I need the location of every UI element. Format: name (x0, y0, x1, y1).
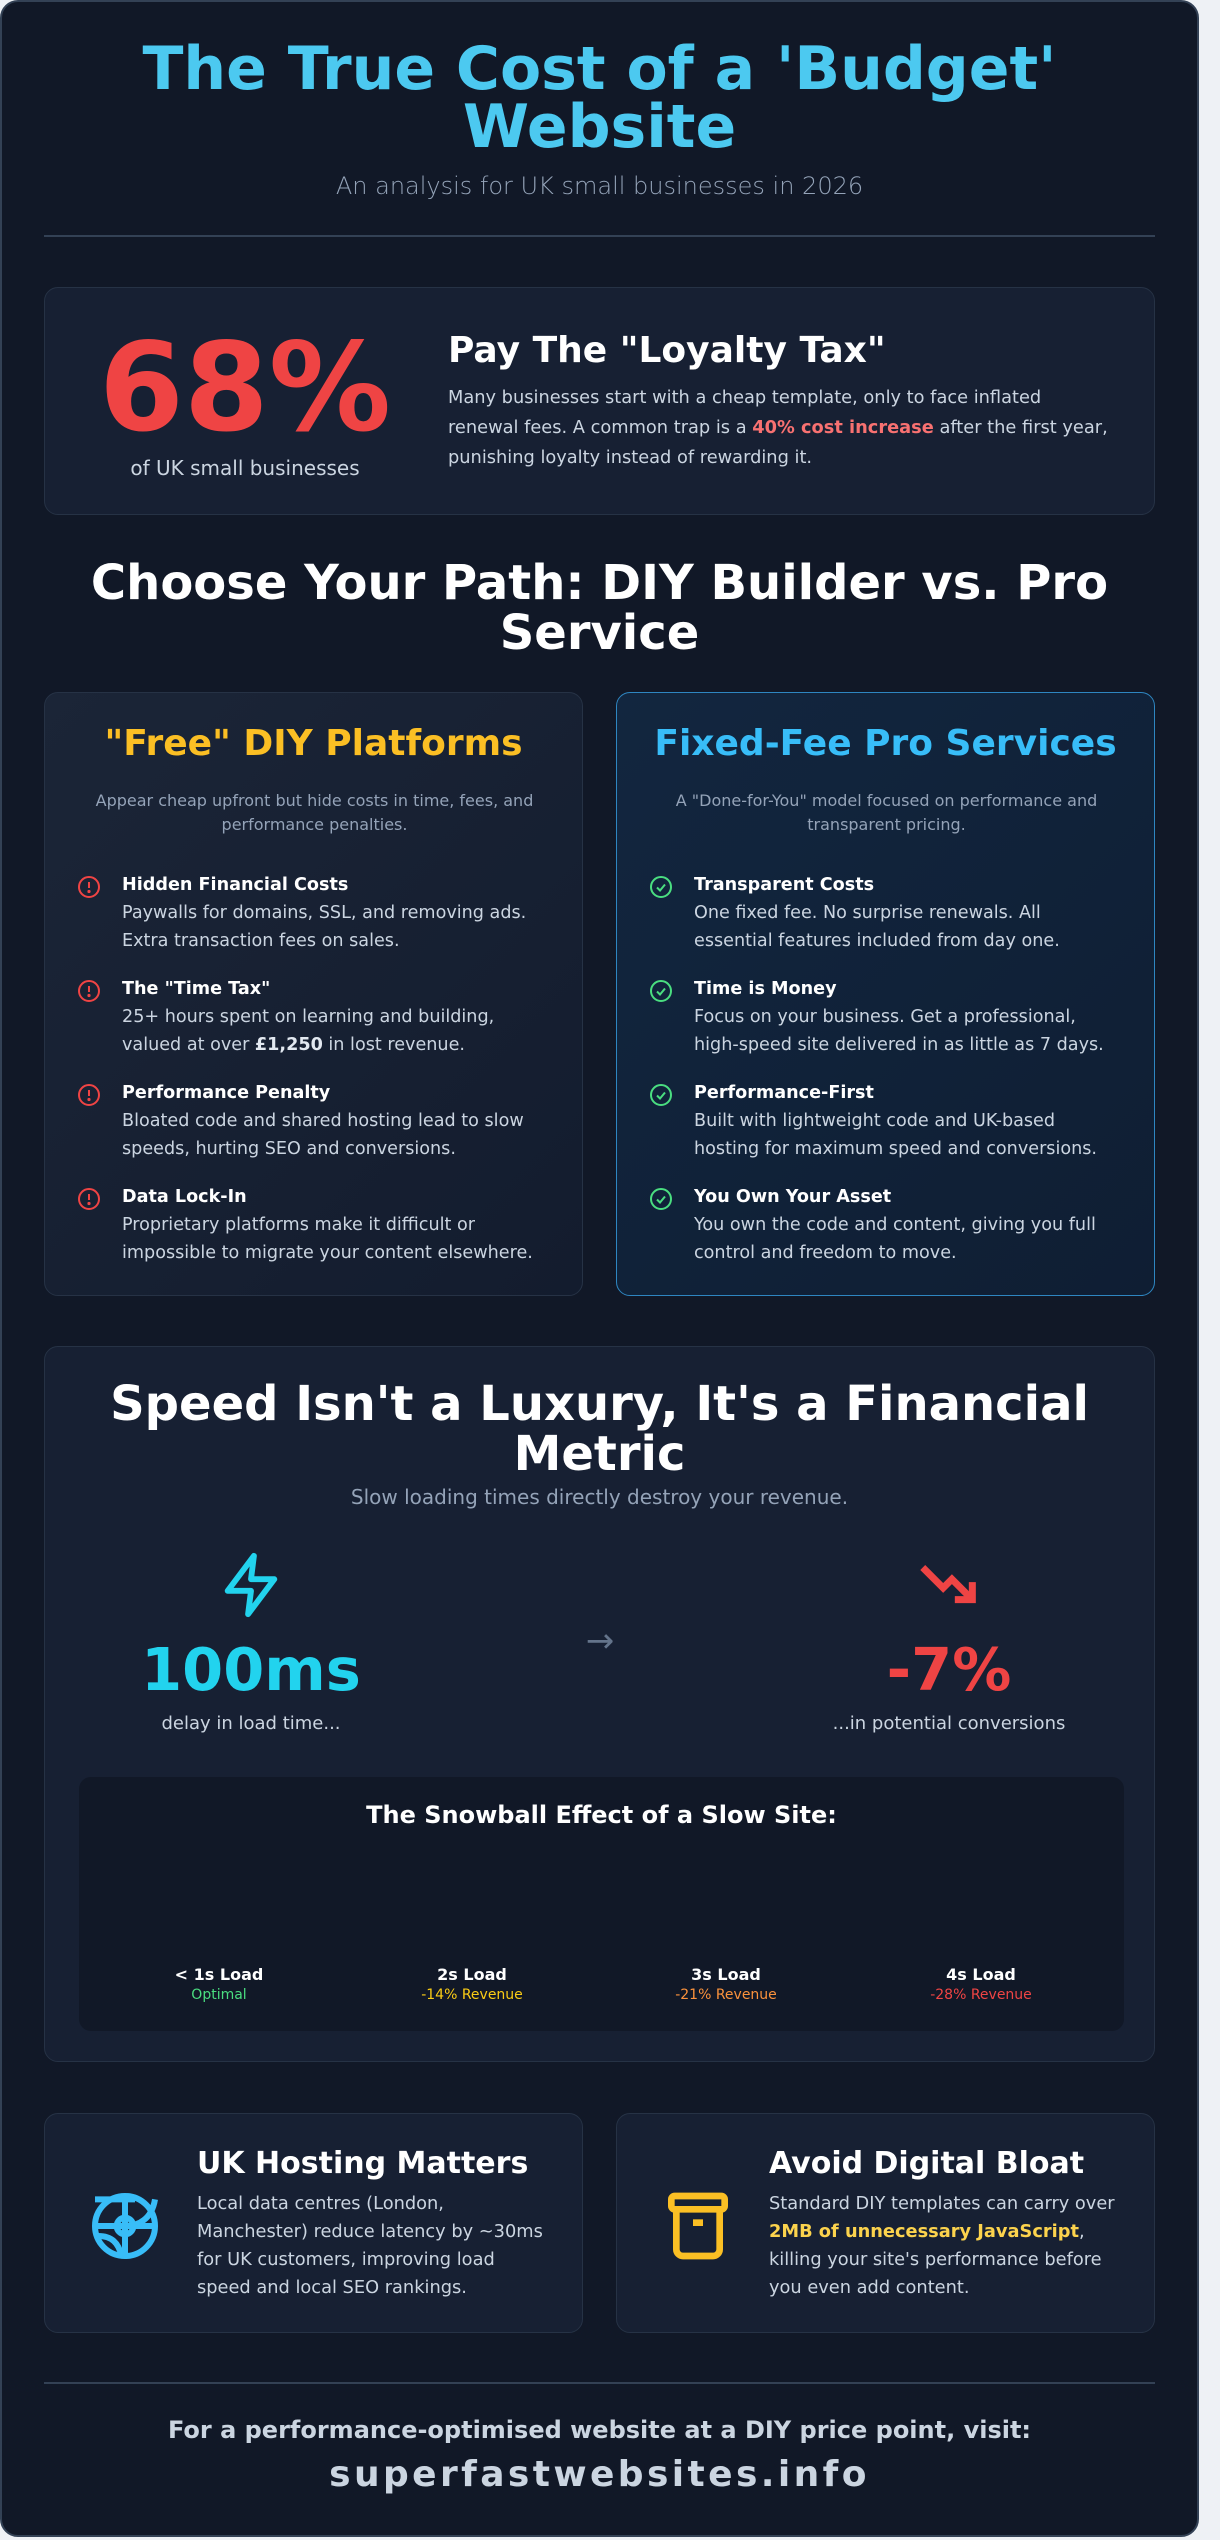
label: 3s (675, 1965, 777, 2003)
item: time is money: Focus on your business. Get a professional, (694, 1007, 1076, 1027)
heading: choose your path (91, 555, 1108, 661)
big stat 68%: 68% (99, 317, 391, 459)
label: <1s: < 1s Load (175, 1965, 263, 1984)
item: own your asset: control and freedom to move. (694, 1243, 957, 1263)
text: killing your site's performance before (769, 2249, 1102, 2270)
footer url: superfastwebsites.info (329, 2454, 870, 2495)
item: performance penalty (78, 1083, 524, 1159)
panel: pro services (616, 692, 1155, 1296)
body text: Many businesses start with a cheap template, only to face inflated (448, 387, 1041, 408)
label: 2s: 2s Load (437, 1965, 507, 1984)
item: data lock-in (78, 1187, 533, 1263)
item: transparent costs (650, 875, 1060, 951)
text: Manchester) reduce latency by ~30ms (197, 2221, 543, 2242)
item: time is money (650, 979, 1104, 1055)
item: performance penalty: speeds, hurting SEO and conversions. (122, 1139, 456, 1159)
text: speed and local SEO rankings. (197, 2277, 467, 2298)
item: time tax: 25+ hours spent on learning and building, (122, 1007, 494, 1027)
panel: loyalty tax stat (44, 287, 1155, 515)
heading: Metric (514, 1426, 685, 1482)
body text: renewal fees. A common trap is a 40% cost increase after the first year, (448, 417, 1108, 438)
item: time tax: valued at over £1,250 in lost revenue. (122, 1035, 465, 1055)
heading (110, 1376, 1089, 1482)
label: 4s: -28% Revenue (930, 1987, 1032, 2003)
heading: "Free" DIY Platforms (104, 723, 523, 764)
title: The True Cost of a 'Budget' (142, 34, 1057, 104)
item: hidden costs: Extra transaction fees on sales. (122, 931, 400, 951)
label: <1s (175, 1965, 263, 2003)
heading: Speed Isn't a Luxury, It's a Financial (110, 1376, 1089, 1432)
icon: lightning (224, 1552, 278, 1618)
item: transparent costs: Transparent Costs (694, 875, 874, 895)
panel: UK hosting (44, 2113, 583, 2333)
icon: trending down (920, 1565, 976, 1604)
heading: Avoid Digital Bloat (769, 2146, 1084, 2181)
stat: 100ms (141, 1552, 361, 1734)
heading: Fixed-Fee Pro Services (654, 723, 1117, 764)
stat caption: of UK small businesses (130, 456, 360, 480)
label: 2s: -14% Revenue (421, 1987, 523, 2003)
item: performance-first (650, 1083, 1097, 1159)
label: 3s: 3s Load (691, 1965, 761, 1984)
item: performance-first: hosting for maximum speed and conversions. (694, 1139, 1097, 1159)
body text (448, 387, 1108, 468)
stat: 100ms: delay in load time... (161, 1713, 341, 1734)
item: data lock-in: Proprietary platforms make it difficult or (122, 1215, 475, 1235)
item: own your asset: You Own Your Asset (694, 1187, 891, 1207)
heading: loyalty tax: Pay The "Loyalty Tax" (448, 330, 886, 371)
item: performance penalty: Performance Penalty (122, 1083, 330, 1103)
item: time tax (78, 979, 494, 1055)
icon: globe (92, 2193, 158, 2259)
item: own your asset (650, 1187, 1096, 1263)
item: transparent costs: One fixed fee. No surprise renewals. All (694, 903, 1041, 923)
label: 4s (930, 1965, 1032, 2003)
stat: -7%: -7% (887, 1635, 1011, 1704)
item: data lock-in: Data Lock-In (122, 1187, 247, 1207)
panel: digital bloat (616, 2113, 1155, 2333)
subtitle: An analysis for UK small businesses in 2026 (336, 172, 863, 200)
body text: punishing loyalty instead of rewarding it. (448, 447, 812, 468)
heading: choose your path: Service (500, 605, 699, 661)
heading: UK Hosting Matters (197, 2146, 528, 2181)
stat: -7% (833, 1565, 1065, 1734)
stat: -7%: ...in potential conversions (833, 1713, 1065, 1734)
stat: 100ms: 100ms (141, 1635, 361, 1704)
subheading: Slow loading times directly destroy your revenue. (351, 1485, 848, 1509)
item: data lock-in: impossible to migrate your content elsewhere. (122, 1243, 533, 1263)
text: 2MB of unnecessary JavaScript, (769, 2221, 1085, 2242)
icon: archive box (668, 2192, 728, 2260)
heading: choose your path: Choose Your Path: DIY Builder vs. Pro (91, 555, 1108, 611)
text: you even add content. (769, 2277, 970, 2298)
item: own your asset: You own the code and content, giving you full (694, 1215, 1096, 1235)
item: transparent costs: essential features included from day one. (694, 931, 1060, 951)
panel: DIY platforms (44, 692, 583, 1296)
chart title: The Snowball Effect of a Slow Site: (366, 1801, 837, 1829)
item: time is money: Time is Money (694, 979, 837, 999)
text: for UK customers, improving load (197, 2249, 495, 2270)
panel: speed metric (44, 1346, 1155, 2062)
label: 4s: 4s Load (946, 1965, 1016, 1984)
text (769, 2193, 1115, 2298)
text (197, 2193, 543, 2298)
item: time tax: The "Time Tax" (122, 979, 270, 999)
item: hidden costs: Paywalls for domains, SSL, and removing ads. (122, 903, 526, 923)
text: Local data centres (London, (197, 2193, 444, 2214)
description: A "Done-for-You" model focused on performance and transparent pricing. (676, 791, 1097, 834)
text: Standard DIY templates can carry over (769, 2193, 1115, 2214)
label: 3s: -21% Revenue (675, 1987, 777, 2003)
label: 2s (421, 1965, 523, 2003)
label: <1s: Optimal (191, 1987, 247, 2003)
chart: snowball effect (79, 1777, 1124, 2031)
description: Appear cheap upfront but hide costs in time, fees, and performance penalties. (96, 791, 533, 834)
footer call to action: For a performance-optimised website at a DIY price point, visit: (168, 2416, 1031, 2444)
item: hidden costs (78, 875, 526, 951)
item: time is money: high-speed site delivered in as little as 7 days. (694, 1035, 1104, 1055)
item: performance-first: Built with lightweight code and UK-based (694, 1111, 1055, 1131)
arrow: → (586, 1621, 614, 1661)
title (142, 34, 1057, 162)
item: hidden costs: Hidden Financial Costs (122, 875, 348, 895)
title: Website (463, 92, 736, 162)
item: performance-first: Performance-First (694, 1083, 874, 1103)
item: performance penalty: Bloated code and shared hosting lead to slow (122, 1111, 524, 1131)
